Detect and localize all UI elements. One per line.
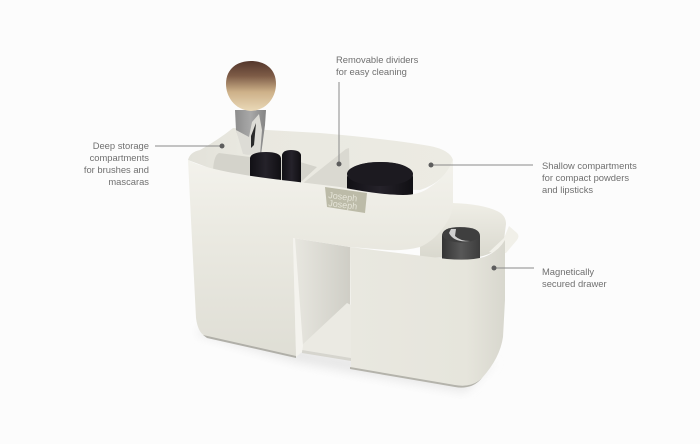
callout line: deep storage (155, 144, 224, 148)
organiser: drawer (350, 203, 518, 388)
logo plate: Joseph (328, 198, 358, 212)
label: shallow compartments: for compact powders (542, 172, 629, 183)
callout line: shallow compartments (428, 162, 533, 168)
label: deep storage: for brushes and (84, 164, 149, 175)
tray interior back and left walls (188, 128, 453, 190)
label: deep storage: compartments (90, 152, 149, 163)
label: shallow compartments: and lipsticks (542, 184, 593, 195)
label: magnetically secured drawer (542, 266, 607, 289)
label: magnetically secured drawer: secured drawer (542, 278, 607, 289)
label: removable dividers: Removable dividers (336, 54, 418, 65)
label: removable dividers: for easy cleaning (336, 66, 407, 77)
callout line: drawer (492, 266, 534, 270)
ground shadow (198, 328, 498, 392)
label: deep storage (84, 140, 149, 187)
label: removable dividers (336, 54, 418, 77)
mascara and small jar (250, 150, 301, 184)
brush (226, 61, 276, 155)
label: deep storage: mascaras (108, 176, 149, 187)
logo plate: Joseph (328, 190, 358, 204)
drawer front (350, 240, 505, 386)
logo plate (325, 187, 367, 213)
callout line: removable dividers (336, 82, 342, 166)
drawer interior (420, 203, 506, 258)
organiser: upper tray and body (188, 61, 453, 358)
label: deep storage: Deep storage (93, 140, 149, 151)
large black jar (347, 162, 413, 196)
centre divider (302, 148, 350, 190)
label: magnetically secured drawer: Magnetically (542, 266, 594, 277)
front face (188, 160, 453, 357)
organiser: central gap (293, 238, 351, 361)
drawer lipstick (442, 227, 480, 262)
rear divider (213, 153, 317, 181)
label: shallow compartments (542, 160, 637, 195)
label: shallow compartments: Shallow compartments (542, 160, 637, 171)
drawer handle (489, 226, 518, 253)
